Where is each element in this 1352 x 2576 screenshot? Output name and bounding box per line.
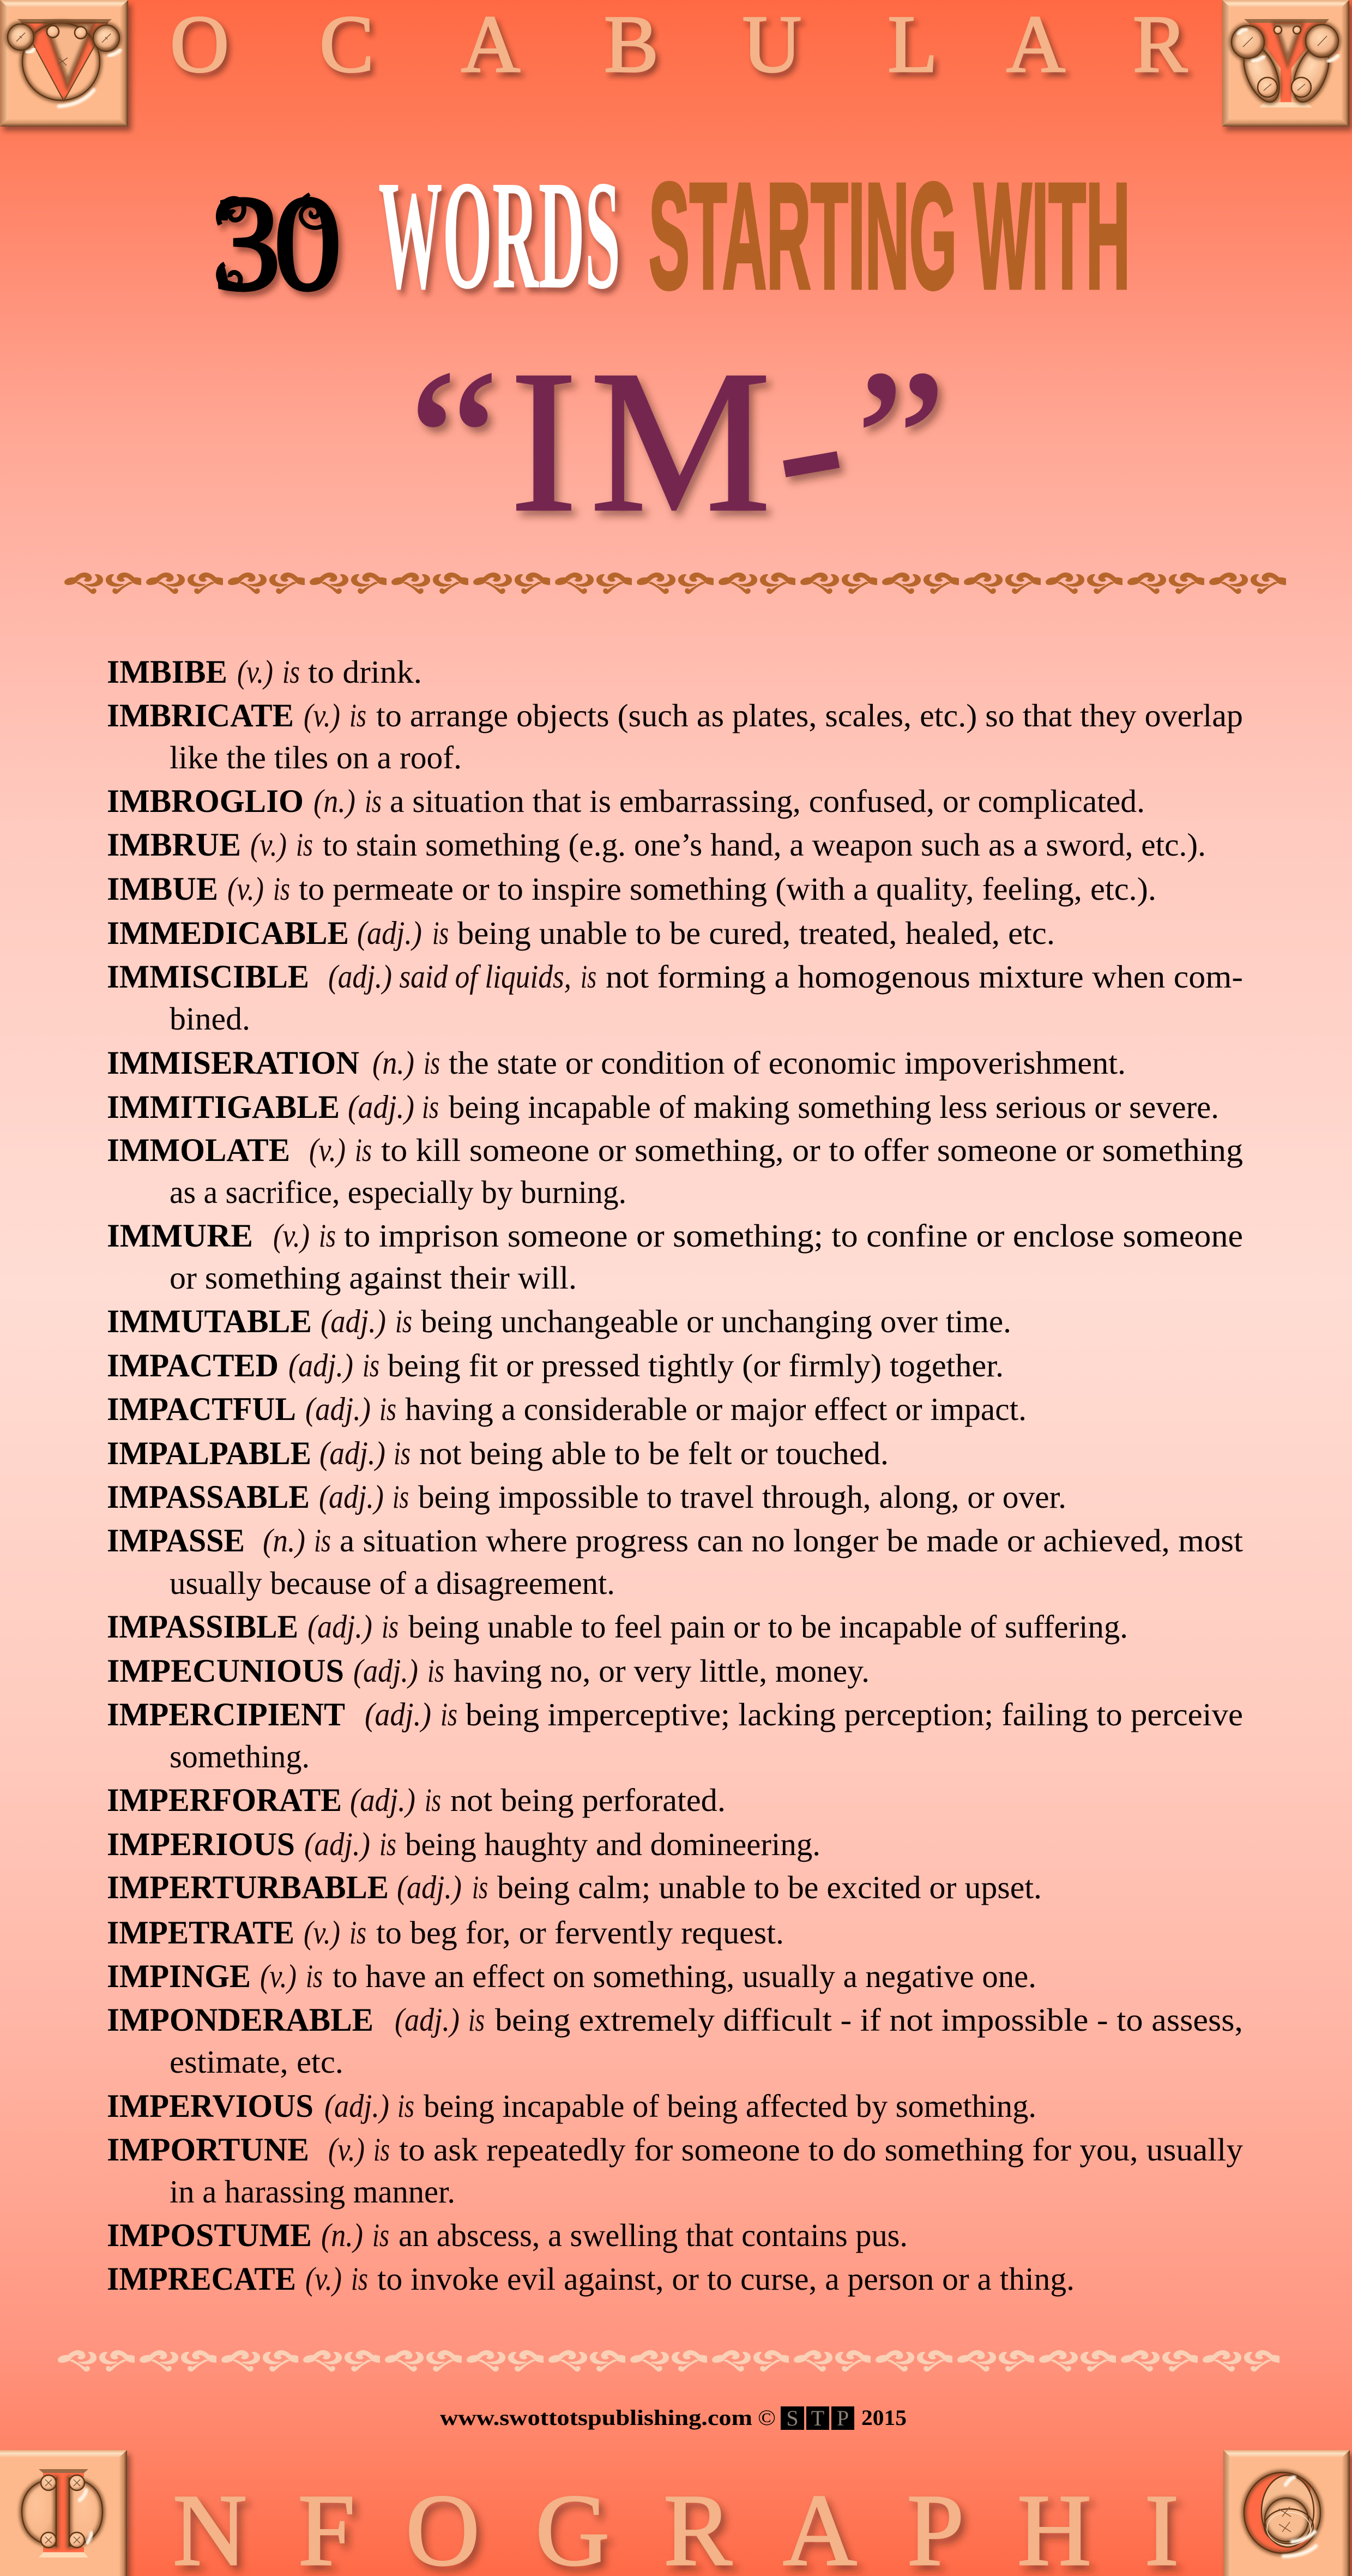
entry: IMPASSIBLE: is [382,1609,399,1645]
entry: IMPERTURBABLE: is [472,1869,488,1905]
entry: IMBUE: is [273,871,290,907]
entry: IMMISCIBLE: not forming a homogenous mixture when com- [606,959,1243,995]
entry: IMPASSE: a situation where progress can no longer be made or achieved, most [340,1522,1244,1558]
entry: IMPORTUNE: to ask repeatedly for someone to do something for you, usually [399,2132,1244,2168]
entry: IMMUTABLE: is [395,1303,412,1339]
logo: STP: STP [786,2406,849,2430]
entry: IMPERTURBABLE: (adj.) [397,1869,462,1905]
entry: IMPERFORATE: not being perforated. [450,1782,726,1818]
entry: IMPALPABLE: (adj.) [319,1435,385,1471]
icon: I tile [0,2450,127,2576]
entry: IMMEDICABLE: (adj.) [357,915,422,951]
title line: 30 words starting with: WORDS [378,148,620,322]
entry: IMPECUNIOUS: is [427,1653,444,1689]
entry: IMPRECATE: is [351,2261,368,2297]
entry: IMMISERATION: IMMISERATION [107,1045,359,1081]
entry: IMBUE: to permeate or to inspire something (with a quality, feeling, etc.). [299,871,1156,907]
entry: IMBUE: (v.) [227,871,264,907]
entry: IMPASSIBLE: IMPASSIBLE [107,1609,298,1645]
entry: IMPONDERABLE: estimate, etc. [170,2044,343,2080]
entry: IMPONDERABLE: is [468,2002,485,2038]
entry: IMMISERATION: the state or condition of economic impoverishment. [449,1045,1126,1081]
entry: IMBRICATE [107,697,1243,775]
entry: IMPERTURBABLE: IMPERTURBABLE [107,1869,389,1905]
entry: IMPINGE: IMPINGE [107,1958,251,1994]
entry: IMPASSABLE: (adj.) [319,1479,384,1515]
entry: IMMUTABLE: (adj.) [321,1303,386,1339]
entry: IMMUTABLE [107,1303,1011,1339]
entry: IMPERVIOUS [107,2088,1036,2124]
entry: IMPOSTUME: (n.) [321,2217,363,2253]
entry: IMPERCIPIENT: (adj.) [365,1696,431,1732]
entry: IMPERIOUS: (adj.) [304,1826,370,1862]
entry: IMBROGLIO: (n.) [313,783,355,819]
entry: IMPASSE [107,1522,1244,1601]
entry: IMPACTFUL [107,1391,1027,1427]
entry: IMMOLATE: as a sacrifice, especially by burning. [170,1174,626,1210]
entry: IMPASSABLE: being impossible to travel through, along, or over. [418,1479,1066,1515]
entry: IMPORTUNE: IMPORTUNE [107,2132,309,2168]
entry: IMPACTFUL: (adj.) [305,1391,371,1427]
entry: IMMURE: or something against their will. [170,1260,577,1296]
entry: IMPOSTUME [107,2217,908,2253]
entry: IMPASSIBLE: being unable to feel pain or to be incapable of suffering. [408,1609,1128,1645]
entry: IMMUTABLE: being unchangeable or unchanging over time. [421,1303,1011,1339]
entry: IMPERVIOUS: is [397,2088,414,2124]
entry: IMPACTED: IMPACTED [107,1347,279,1383]
entry: IMMEDICABLE [107,915,1055,951]
title line: 30 words starting with [213,148,1130,322]
entry: IMBRUE: to stain something (e.g. one’s hand, a weapon such as a sword, etc.). [323,827,1206,863]
entry: IMPALPABLE [107,1435,889,1471]
entry: IMPERIOUS [107,1826,820,1862]
entry: IMPONDERABLE: IMPONDERABLE [107,2002,373,2038]
entry: IMPORTUNE: (v.) [328,2132,365,2168]
entry: IMPERIOUS: IMPERIOUS [107,1826,295,1862]
entry: IMMITIGABLE: IMMITIGABLE [107,1089,340,1125]
entry: IMMOLATE: is [355,1132,372,1168]
divider: top ornament [61,568,1290,598]
entry: IMPOSTUME: an abscess, a swelling that contains pus. [399,2217,908,2253]
entry: IMBROGLIO: IMBROGLIO [107,783,304,819]
entry: IMMISCIBLE: is [581,959,596,995]
entry: IMMISERATION: is [424,1045,440,1081]
entry: IMPONDERABLE [107,2002,1243,2080]
entry: IMMISERATION [107,1045,1126,1081]
entry: IMMISCIBLE: (adj.) said of liquids, [328,959,571,995]
entry: IMPINGE: (v.) [260,1958,297,1994]
entry: IMBIBE: is [282,654,300,690]
entry: IMPETRATE: is [349,1915,366,1951]
entry: IMBRICATE: to arrange objects (such as plates, scales, etc.) so that they overlap [376,697,1243,733]
entry: IMBRICATE: IMBRICATE [107,697,294,733]
entry: IMMURE [107,1218,1243,1296]
entry: IMPERCIPIENT: being imperceptive; lacking perception; failing to perceive [466,1696,1243,1732]
entry: IMMITIGABLE [107,1089,1219,1125]
heading: VOCABULAR letters: OCABULAR [170,0,1187,89]
entry: IMPERVIOUS: being incapable of being affected by something. [424,2088,1036,2124]
entry: IMMISCIBLE: IMMISCIBLE [107,959,309,995]
entry: IMMITIGABLE: (adj.) [348,1089,414,1125]
entry: IMPETRATE: (v.) [304,1915,340,1951]
entry: IMMEDICABLE: IMMEDICABLE [107,915,349,951]
entry: IMPERIOUS: being haughty and domineering. [405,1826,820,1862]
entry: IMPRECATE: IMPRECATE [107,2261,296,2297]
entry: IMBRUE: (v.) [250,827,287,863]
entry: IMPASSABLE: is [393,1479,409,1515]
entry: IMBRUE: is [296,827,313,863]
entry: IMPRECATE: (v.) [305,2261,342,2297]
entry: IMPERTURBABLE [107,1869,1042,1905]
entry: IMPERTURBABLE: being calm; unable to be excited or upset. [497,1869,1042,1905]
divider: bottom ornament [55,2346,1283,2375]
entry: IMPORTUNE [107,2132,1244,2210]
number 30: 30 [213,168,342,319]
entry: IMMITIGABLE: is [422,1089,439,1125]
entry: IMMURE: to imprison someone or something; to confine or enclose someone [344,1218,1243,1254]
entry: IMPACTED [107,1347,1004,1383]
entry: IMPASSE: is [314,1522,331,1558]
entry: IMPECUNIOUS: IMPECUNIOUS [107,1653,344,1689]
entry: IMPORTUNE: in a harassing manner. [170,2174,455,2210]
entry: IMPALPABLE: not being able to be felt or touched. [419,1435,889,1471]
footer credit line [440,2405,907,2430]
entry: IMPACTFUL: having a considerable or major effect or impact. [405,1391,1027,1427]
entry: IMPACTED: (adj.) [288,1347,353,1383]
entry: IMMURE: (v.) [273,1218,310,1254]
entry: IMPACTFUL: is [379,1391,396,1427]
entry: IMBRICATE: like the tiles on a roof. [170,739,462,775]
entry: IMPERCIPIENT: is [440,1696,457,1732]
footer credit line: © [758,2405,776,2430]
entry: IMMISCIBLE [107,959,1243,1037]
entry: IMBROGLIO: a situation that is embarrassing, confused, or complicated. [390,783,1145,819]
entry: IMPINGE: is [306,1958,323,1994]
entry: IMPECUNIOUS: (adj.) [353,1653,418,1689]
entry: IMMUTABLE: IMMUTABLE [107,1303,312,1339]
entry: IMBRICATE: is [349,697,366,733]
entry: IMPINGE: to have an effect on something, usually a negative one. [333,1958,1036,1994]
entry: IMPASSE: usually because of a disagreement. [170,1565,615,1601]
entry: IMMURE: IMMURE [107,1218,253,1254]
entry: IMPERFORATE: IMPERFORATE [107,1782,342,1818]
icon: Y tile [1222,0,1349,127]
entry: IMPALPABLE: is [394,1435,411,1471]
entry: IMMISCIBLE: bined. [170,1001,250,1037]
entry: IMPERFORATE: is [425,1782,441,1818]
entry: IMPOSTUME: is [372,2217,389,2253]
entry: IMPASSE: (n.) [263,1522,305,1558]
entry: IMPETRATE [107,1915,784,1951]
entry: IMPACTED: is [363,1347,379,1383]
entry: IMPACTFUL: IMPACTFUL [107,1391,296,1427]
entry: IMPERVIOUS: IMPERVIOUS [107,2088,313,2124]
icon: V tile [0,0,128,127]
entry: IMPECUNIOUS: having no, or very little, money. [454,1653,870,1689]
entry: IMMEDICABLE: is [432,915,449,951]
entry: IMBIBE: to drink. [308,654,422,690]
heading: IM-: “IM-” [409,327,946,561]
entry: IMPACTED: being fit or pressed tightly (or firmly) together. [388,1347,1004,1383]
entry: IMPETRATE: to beg for, or fervently request. [376,1915,784,1951]
entry: IMMOLATE [107,1132,1243,1210]
entry: IMMISERATION: (n.) [372,1045,414,1081]
entry: IMPERCIPIENT: IMPERCIPIENT [107,1696,345,1732]
entry: IMPERCIPIENT [107,1696,1243,1774]
entry: IMPASSABLE: IMPASSABLE [107,1479,310,1515]
entry: IMPERVIOUS: (adj.) [324,2088,389,2124]
entry: IMBUE: IMBUE [107,871,218,907]
entry: IMPOSTUME: IMPOSTUME [107,2217,312,2253]
footer credit line: 2015 [861,2405,907,2430]
word list [107,654,1244,2297]
entry: IMMURE: is [319,1218,336,1254]
entry: IMMEDICABLE: being unable to be cured, treated, healed, etc. [457,915,1055,951]
entry: IMBIBE: (v.) [237,654,273,690]
entry: IMPALPABLE: IMPALPABLE [107,1435,311,1471]
entry: IMPASSABLE [107,1479,1066,1515]
entry: IMPORTUNE: is [373,2132,390,2168]
entry: IMPRECATE: to invoke evil against, or to curse, a person or a thing. [377,2261,1075,2297]
entry: IMBRICATE: (v.) [304,697,340,733]
entry: IMBRUE: IMBRUE [107,827,241,863]
footer credit line: www.swottotspublishing.com [440,2405,752,2430]
entry: IMPERIOUS: is [379,1826,396,1862]
entry: IMPERFORATE [107,1782,726,1818]
icon: C tile [1223,2450,1350,2576]
entry: IMMOLATE: to kill someone or something, or to offer someone or something [381,1132,1243,1168]
entry: IMPETRATE: IMPETRATE [107,1915,294,1951]
entry: IMMITIGABLE: being incapable of making something less serious or severe. [449,1089,1219,1125]
entry: IMPONDERABLE: being extremely difficult - if not impossible - to assess, [495,2002,1243,2038]
entry: IMPERCIPIENT: something. [170,1738,310,1774]
entry: IMBIBE: IMBIBE [107,654,227,690]
entry: IMBIBE [107,654,422,690]
entry: IMPASSIBLE: (adj.) [307,1609,372,1645]
entry: IMMOLATE: IMMOLATE [107,1132,290,1168]
entry: IMPONDERABLE: (adj.) [395,2002,460,2038]
entry: IMPECUNIOUS [107,1653,870,1689]
entry: IMBROGLIO: is [365,783,382,819]
entry: IMPASSE: IMPASSE [107,1522,245,1558]
entry: IMMOLATE: (v.) [309,1132,346,1168]
entry: IMPERFORATE: (adj.) [350,1782,415,1818]
